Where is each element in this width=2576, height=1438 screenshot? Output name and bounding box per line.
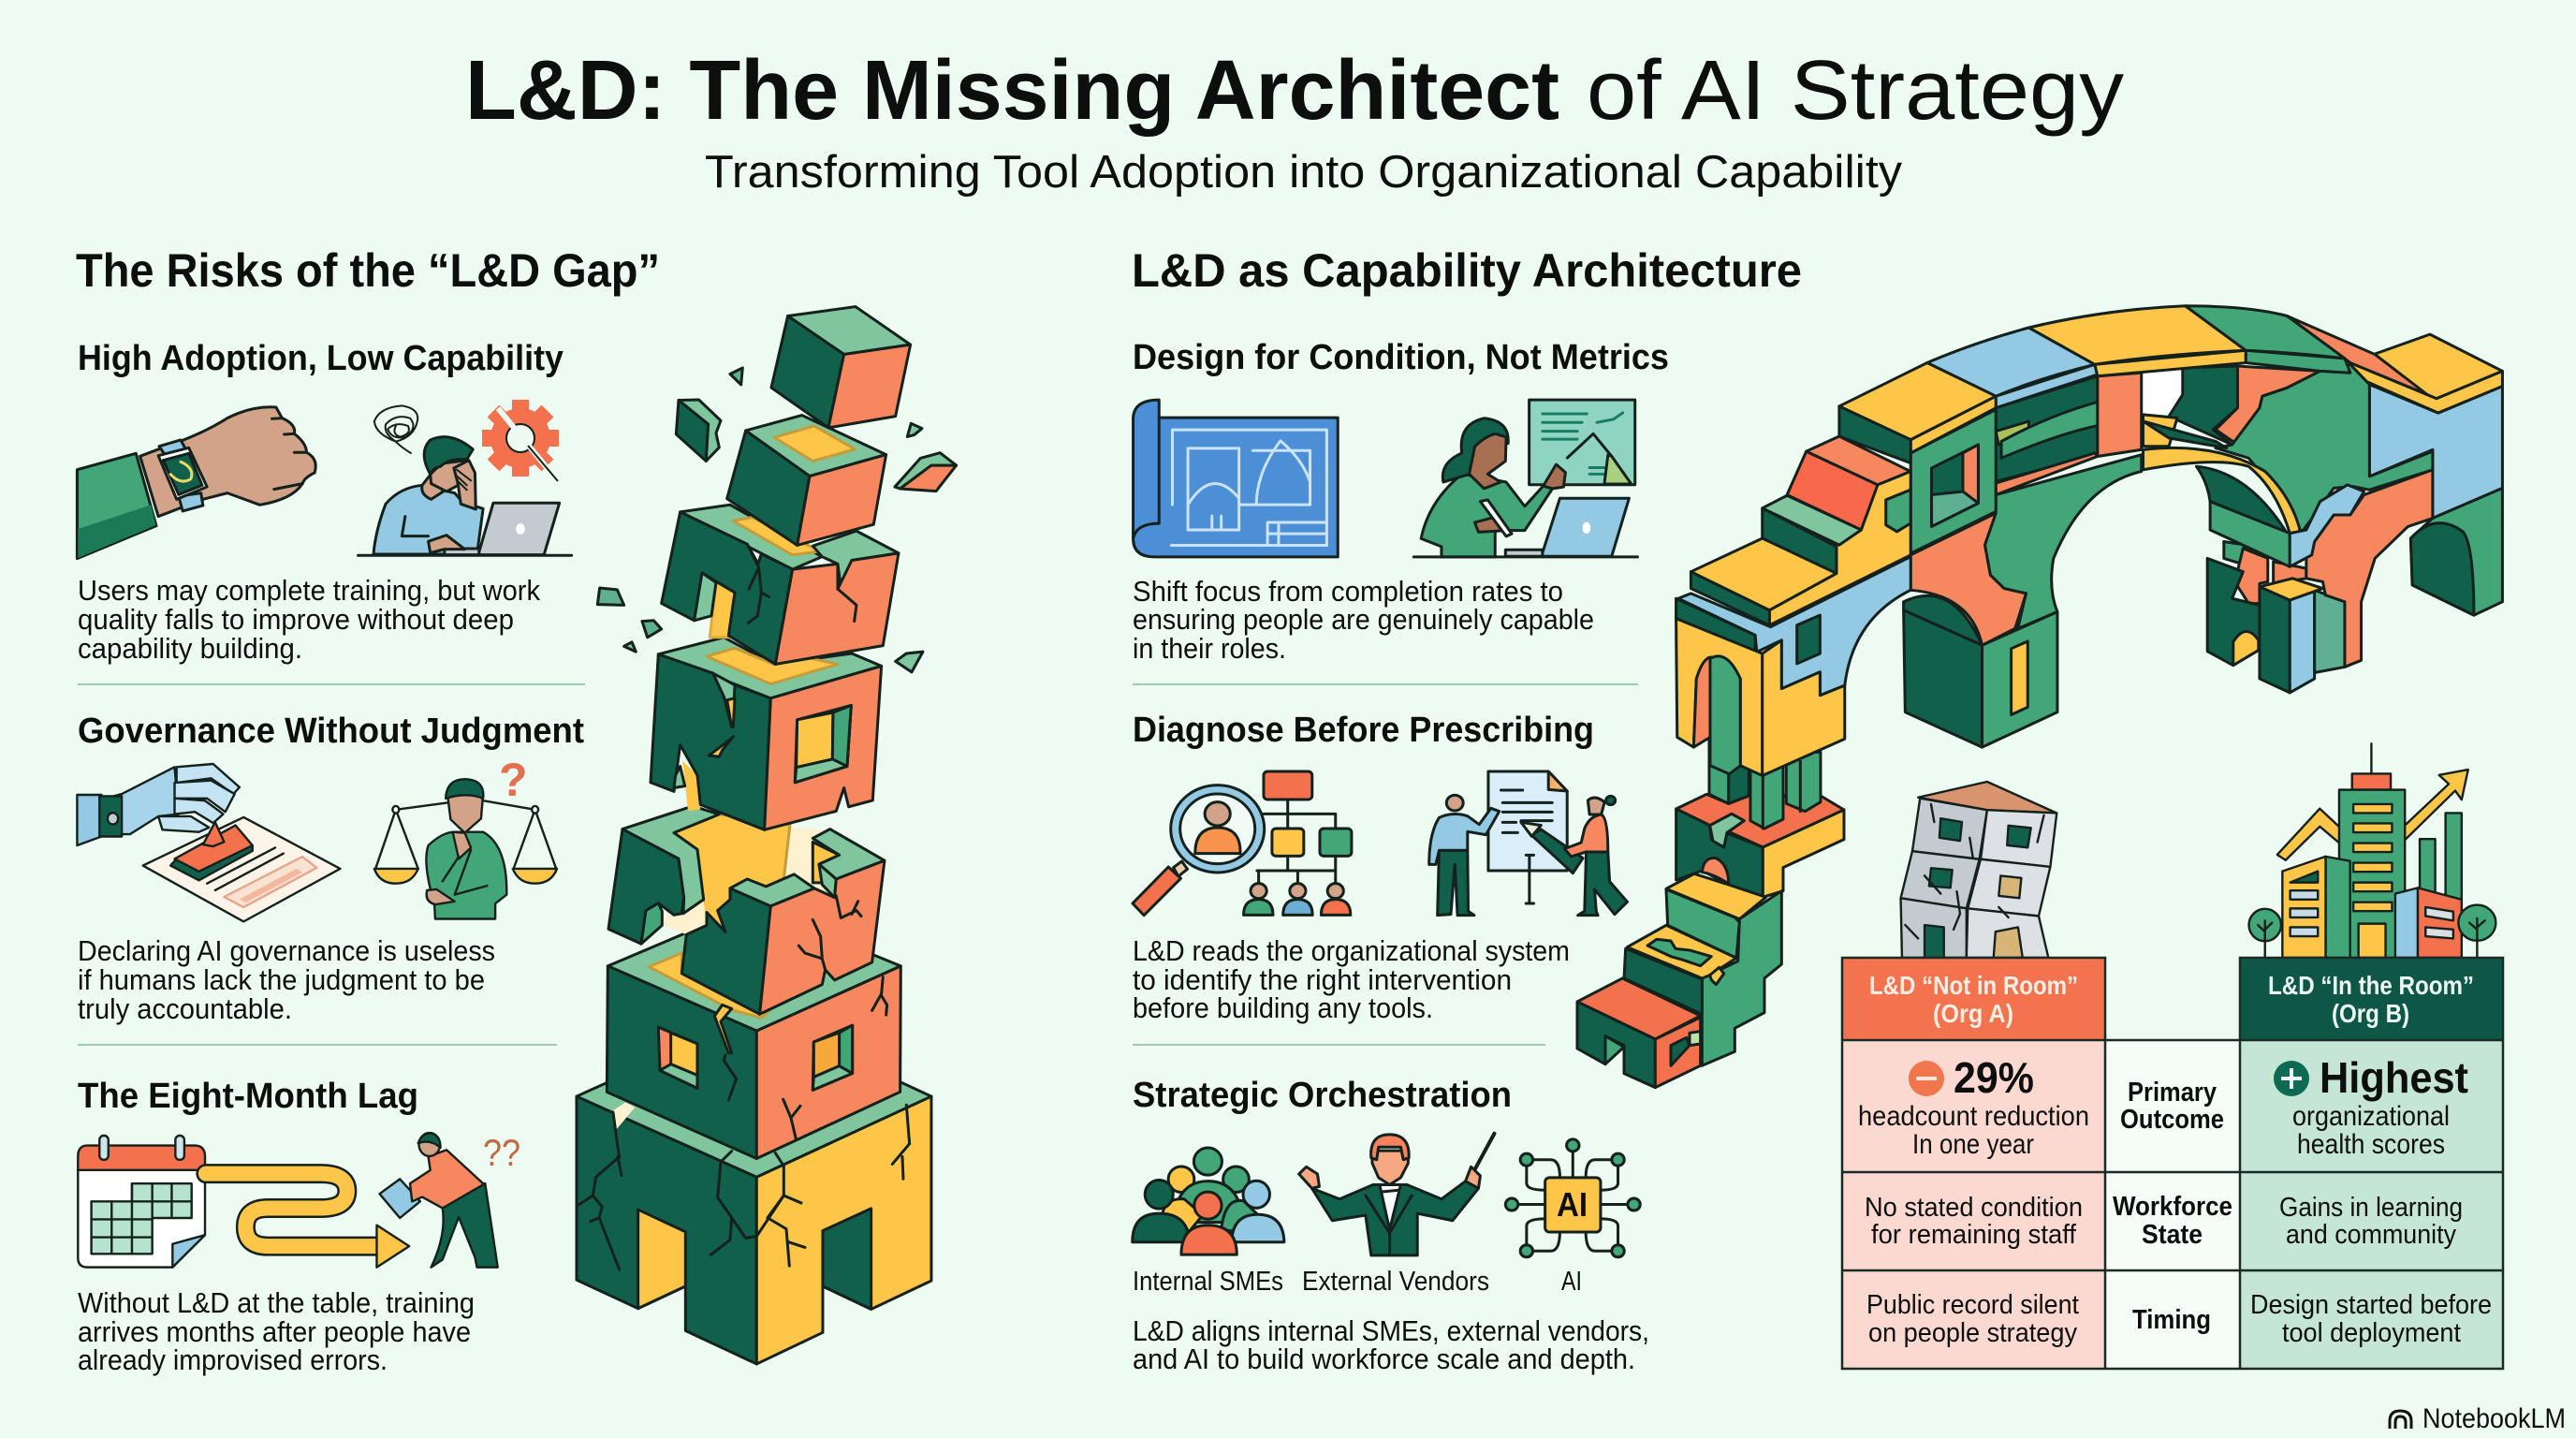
description: design for condition — [1133, 575, 1594, 665]
row: primary outcome, org B: health scores — [2297, 1129, 2445, 1160]
orchestration labels: Internal SMEs — [1133, 1267, 1283, 1297]
row: timing: on people strategy — [1868, 1318, 2077, 1348]
description: diagnose — [1133, 934, 1570, 1024]
description: design for condition: Shift focus from completion rates to — [1133, 575, 1563, 608]
row: workforce state: for remaining staff — [1871, 1220, 2077, 1250]
illustration: stable arch — [1676, 306, 2502, 776]
row: primary outcome, org B — [2274, 1053, 2468, 1160]
panel: risks of the L&D gap — [76, 244, 660, 1376]
header: org B: (Org B) — [2332, 999, 2409, 1028]
upper tower blocks and flying debris — [597, 307, 957, 829]
row: timing: Public record silent — [1866, 1290, 2079, 1320]
row label: primary outcome: Outcome — [2120, 1105, 2224, 1135]
main arch wall — [1984, 455, 2142, 628]
section heading right: L&D as Capability Architecture — [1132, 244, 1802, 297]
right piers — [2142, 369, 2183, 415]
icon: crumbling building — [1901, 782, 2056, 958]
panel: L&D as capability architecture — [1132, 244, 1802, 1375]
back wall — [2169, 366, 2237, 445]
header: org A: (Org A) — [1933, 999, 2013, 1028]
description: diagnose: before building any tools. — [1133, 991, 1433, 1024]
description: high adoption: capability building. — [78, 632, 302, 665]
description: orchestration: and AI to build workforce scale and depth. — [1133, 1343, 1635, 1375]
row: primary outcome, org A — [1858, 1053, 2089, 1160]
description: orchestration — [1133, 1314, 1649, 1375]
row: timing: tool deployment — [2282, 1318, 2461, 1348]
icon: robot hand stamping document — [77, 764, 340, 921]
orchestration labels — [1133, 1267, 1582, 1297]
icon: calendar with delayed arrow — [78, 1133, 498, 1268]
description: eight-month lag: Without L&D at the table, training — [78, 1286, 475, 1319]
orchestration labels: External Vendors — [1302, 1267, 1489, 1297]
top bands — [1996, 364, 2098, 408]
icon: blueprint — [1134, 400, 1338, 557]
front pier — [1676, 619, 1763, 776]
comparison table — [1842, 958, 2503, 1369]
description: governance: Declaring AI governance is useless — [78, 934, 495, 967]
row: timing: Design started before — [2250, 1290, 2492, 1320]
row: primary outcome, org B: Highest — [2320, 1053, 2468, 1102]
block 1 — [788, 307, 911, 354]
description: eight-month lag: already improvised errors. — [78, 1343, 388, 1376]
description: governance: if humans lack the judgment to be — [78, 963, 485, 996]
icon: group of SMEs — [1133, 1148, 1284, 1255]
lower tower blocks — [577, 806, 931, 1364]
icon: thriving city with growth arrow — [2249, 743, 2496, 958]
icon: two people drafting a plan — [1429, 771, 1628, 916]
header: title and subtitle — [465, 44, 2124, 198]
icon: NotebookLM logo — [2390, 1411, 2411, 1429]
debris — [730, 368, 742, 385]
description: orchestration: L&D aligns internal SMEs, external vendors, — [1133, 1314, 1649, 1347]
icon: person weighing scales — [374, 779, 557, 918]
description: high adoption — [78, 574, 540, 665]
NotebookLM badge — [2390, 1403, 2566, 1434]
icon: frustrated worker with broken gear — [359, 400, 572, 555]
row: timing: Timing — [2132, 1305, 2211, 1335]
description: design for condition: in their roles. — [1133, 632, 1286, 665]
row: primary outcome, org A: In one year — [1912, 1129, 2034, 1160]
title: bold part: L&D: The Missing Architect — [465, 44, 1559, 138]
row label: primary outcome — [2120, 1078, 2224, 1135]
row label: primary outcome: Primary — [2128, 1078, 2217, 1108]
icon: question mark: ? — [499, 754, 528, 806]
illustration: stepped base and columns of arch — [1577, 721, 1844, 1088]
description: diagnose: to identify the right intervention — [1133, 963, 1512, 996]
row: primary outcome, org A: headcount reduction — [1858, 1101, 2089, 1132]
left blue section — [1678, 557, 1910, 696]
block 5 — [780, 828, 836, 892]
AI chip label: AI — [1557, 1185, 1588, 1224]
far right pier — [2369, 385, 2502, 519]
subheading: strategic orchestration: Strategic Orchestration — [1133, 1076, 1512, 1115]
subheading: design for condition: Design for Condition, Not Metrics — [1133, 338, 1669, 377]
row: workforce state: and community — [2286, 1220, 2456, 1250]
row: workforce state: State — [2142, 1220, 2203, 1250]
orchestration labels: AI — [1561, 1267, 1582, 1297]
block 6 — [607, 932, 900, 1031]
subtitle: Transforming Tool Adoption into Organizational Capability — [705, 147, 1903, 198]
icon: confused question marks: ?? — [483, 1133, 520, 1174]
block 3 — [681, 505, 822, 569]
subheading: diagnose: Diagnose Before Prescribing — [1133, 711, 1594, 750]
subheading: governance: Governance Without Judgment — [78, 712, 584, 751]
subheading: eight-month lag: The Eight-Month Lag — [78, 1077, 418, 1116]
row: workforce state: No stated condition — [1865, 1193, 2083, 1223]
description: high adoption: quality falls to improve without deep — [78, 603, 514, 636]
description: governance: truly accountable. — [78, 992, 292, 1025]
subheading: high adoption: High Adoption, Low Capability — [78, 339, 564, 378]
icon: woman presenting chart — [1413, 400, 1637, 557]
description: diagnose: L&D reads the organizational system — [1133, 934, 1570, 967]
row: primary outcome, org B: organizational — [2292, 1101, 2450, 1132]
description: design for condition: ensuring people are genuinely capable — [1133, 603, 1594, 636]
window frame — [1910, 409, 1996, 553]
table fills and grid — [1842, 958, 2503, 1369]
description: high adoption: Users may complete training, but work — [78, 574, 540, 607]
row: workforce state — [1865, 1192, 2463, 1250]
header: org A — [1869, 971, 2078, 1028]
icon: conductor — [1299, 1134, 1494, 1255]
interior ribs — [1996, 376, 2098, 481]
row: workforce state: Gains in learning — [2279, 1193, 2463, 1223]
header: org B — [2268, 971, 2474, 1028]
title: regular part: of AI Strategy — [1587, 44, 2124, 138]
description: governance — [78, 934, 495, 1025]
illustration: crumbling tower — [577, 307, 957, 1364]
description: eight-month lag: arrives months after people have — [78, 1315, 471, 1348]
header: org A: L&D “Not in Room” — [1869, 971, 2078, 1000]
header: org B: L&D “In the Room” — [2268, 971, 2474, 1000]
block 4 — [682, 761, 700, 811]
icon: magnifier over org chart — [1133, 771, 1352, 916]
icon: smartwatch on wrist — [77, 407, 315, 559]
row: workforce state: Workforce — [2113, 1192, 2232, 1222]
block 2 — [746, 416, 886, 477]
icon: AI chip network — [1505, 1139, 1640, 1257]
row: timing — [1866, 1290, 2492, 1348]
broken gear — [482, 400, 559, 481]
row: primary outcome, org A: 29% — [1954, 1053, 2034, 1102]
description: eight-month lag — [78, 1286, 475, 1376]
section heading left: The Risks of the “L&D Gap” — [76, 244, 660, 297]
stair and left wall — [1787, 451, 1878, 530]
